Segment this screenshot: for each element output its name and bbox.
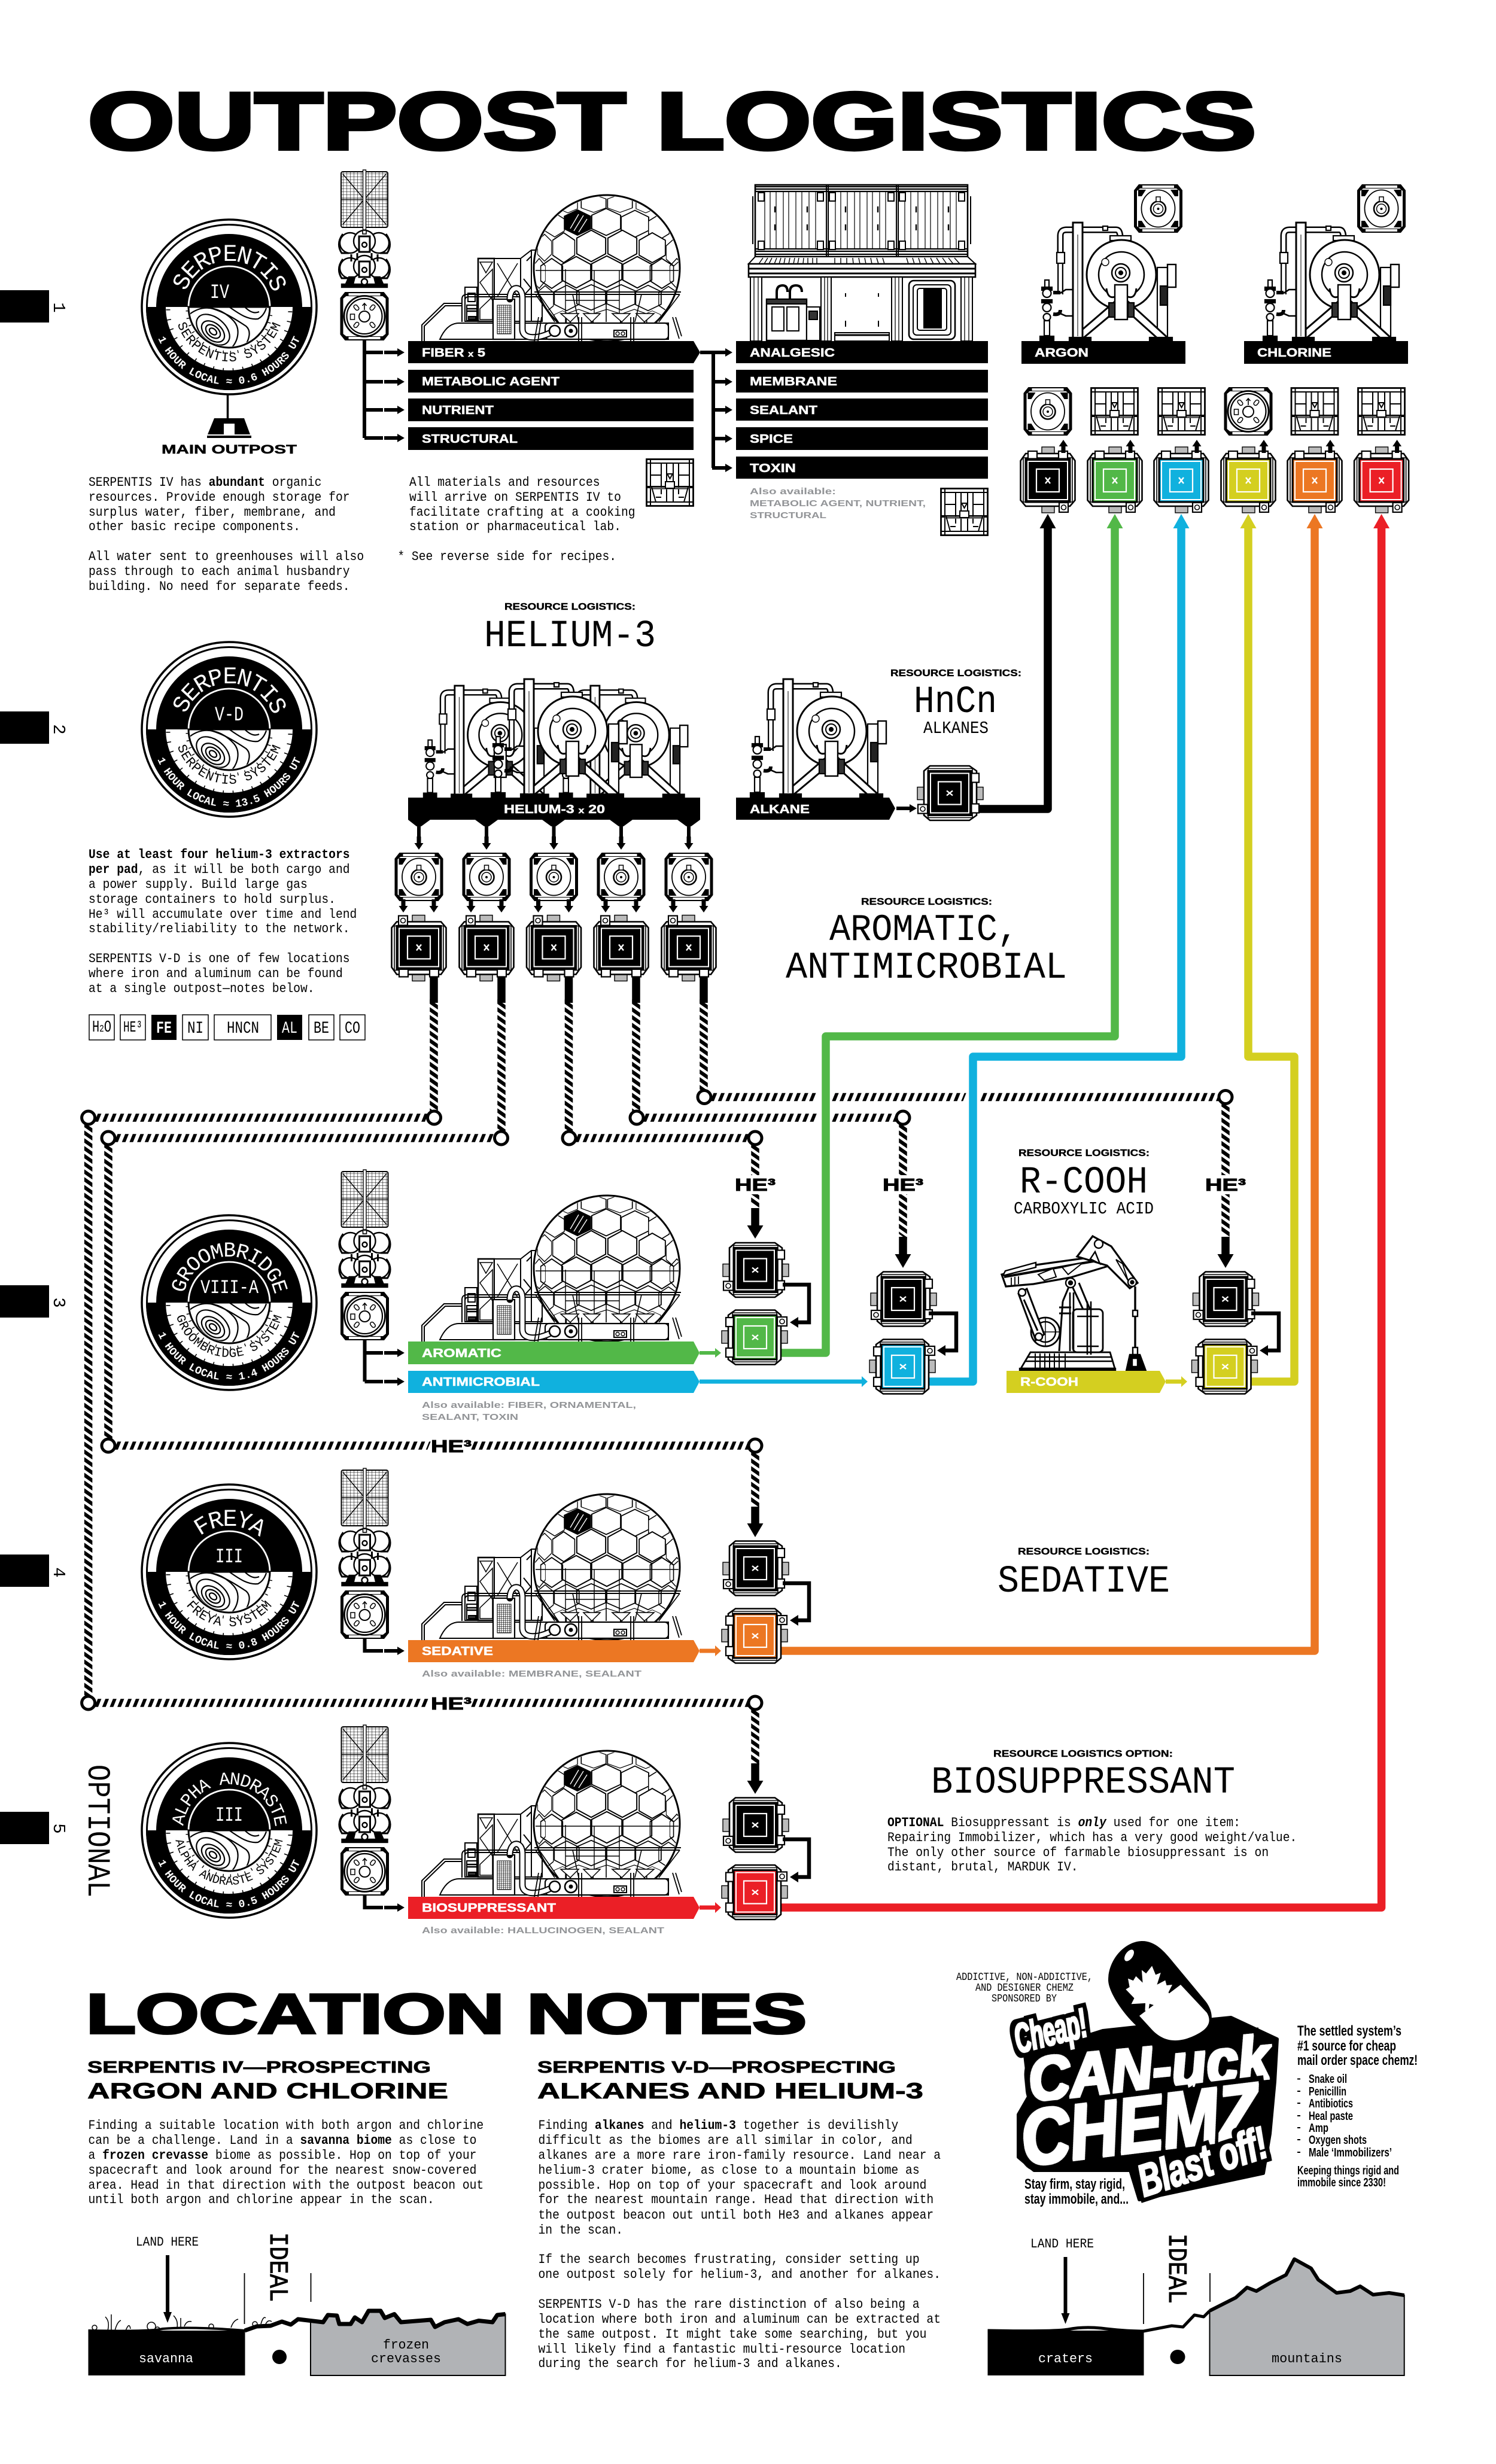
badge: Groombridge VIII-A: GROOMBRIDGE xyxy=(172,1242,288,1294)
resource bars: recipes: ANALGESIC xyxy=(750,346,835,360)
alkane extractor xyxy=(736,679,983,820)
text: Serpentis IV notes: SERPENTIS IV has abundant organic xyxy=(89,476,321,490)
HE3 labels on rails: HE³ xyxy=(883,1176,923,1195)
diagram: craters to mountains: mountains xyxy=(1272,2352,1342,2366)
stack: solar, pods, extractor xyxy=(339,170,390,340)
text: materials note: facilitate crafting at a cooking xyxy=(409,506,636,520)
text: Serpentis IV location note: a frozen crevasse biome as possible. Hop on top of your xyxy=(89,2149,476,2163)
text: Serpentis IV notes: resources. Provide enough storage for xyxy=(89,491,350,505)
chlorine extractor xyxy=(1244,184,1408,364)
heading: sedative: SEDATIVE xyxy=(998,1560,1170,1604)
branch arrow: Alpha Andraste xyxy=(365,1896,405,1912)
ad copy column: immobile since 2330! xyxy=(1297,2176,1386,2189)
subheading: Serpentis V-D prospecting: SERPENTIS V-D—PROSPECTING xyxy=(537,2058,896,2076)
resource bars: Serpentis IV: FIBER x 5 xyxy=(422,346,485,360)
sponsor line xyxy=(956,1972,1093,2005)
colored resource routes xyxy=(781,527,1382,1908)
text: Serpentis V-D notes: storage containers to hold surplus. xyxy=(89,893,336,907)
element boxes: HNCN xyxy=(227,1020,259,1038)
diagram: savanna to frozen crevasses: LAND HERE xyxy=(136,2235,199,2250)
heading: R-COOH: R-COOH xyxy=(1020,1161,1148,1204)
section tab 2: 2 xyxy=(48,724,68,735)
heading: biosuppressant: BIOSUPPRESSANT xyxy=(931,1762,1235,1805)
text: biosuppressant note: OPTIONAL Biosuppressant is only used for one item: xyxy=(887,1816,1240,1830)
main outpost marker: MAIN OUTPOST xyxy=(162,443,297,457)
resource bars: recipes: TOXIN xyxy=(750,462,796,475)
branching arrows to resources xyxy=(364,340,405,442)
badge: Freya III xyxy=(141,1483,318,1660)
route arrowheads xyxy=(1040,514,1389,528)
argon extractor: ARGON xyxy=(1035,346,1088,360)
ad copy column: mail order space chemz! xyxy=(1297,2052,1418,2068)
heading: helium-3: RESOURCE LOGISTICS: xyxy=(504,602,636,612)
bar: R-COOH: R-COOH xyxy=(1020,1376,1078,1389)
also available: Serpentis IV: STRUCTURAL xyxy=(750,510,826,521)
optional vertical label: OPTIONAL xyxy=(78,1765,115,1897)
stack: Groombridge xyxy=(339,1170,390,1340)
element boxes: FE xyxy=(156,1020,172,1038)
text: materials note: All materials and resources xyxy=(409,476,600,490)
resource bars: recipes xyxy=(736,341,988,479)
also available: Groombridge xyxy=(422,1400,636,1422)
diagram: craters to mountains xyxy=(987,2234,1404,2375)
text: Serpentis V-D location note: during the search for helium-3 and alkanes. xyxy=(539,2357,842,2371)
ad copy column: Male ‘Immobilizers’ xyxy=(1309,2146,1392,2159)
text: Serpentis IV location note xyxy=(89,2119,484,2207)
also available: Serpentis IV: Also available: xyxy=(750,486,836,497)
pumpjack xyxy=(1002,1236,1146,1371)
helium-3 striped rail network xyxy=(82,1002,1232,1763)
ad tagline: Stay firm, stay rigid, xyxy=(1024,2176,1125,2192)
text: Serpentis V-D notes: stability/reliability to the network. xyxy=(89,922,350,936)
text: Serpentis V-D location note xyxy=(539,2119,941,2371)
greenhouse xyxy=(422,194,683,341)
ad logo: Can-uck Chemz: CAN-uck xyxy=(1025,2022,1276,2115)
text: Serpentis V-D location note: alkanes are a more rare iron-family resource. Land near a xyxy=(539,2149,941,2163)
heading: R-COOH xyxy=(1014,1148,1154,1219)
heading: biosuppressant: RESOURCE LOGISTICS OPTION: xyxy=(993,1749,1173,1759)
processing pair: blue xyxy=(869,1237,956,1394)
ad copy column xyxy=(1297,2023,1418,2189)
greenhouse: Alpha Andraste xyxy=(422,1750,683,1897)
resource bars: Serpentis IV: METABOLIC AGENT xyxy=(422,375,560,388)
text: Serpentis IV location note: can be a challenge. Land in a savanna biome as close to xyxy=(89,2134,476,2148)
text: Serpentis V-D notes: per pad, as it will be both cargo and xyxy=(89,863,350,877)
text: Serpentis V-D location note: SERPENTIS V-D has the rare distinction of also being a xyxy=(539,2298,920,2312)
ad copy column: Heal paste xyxy=(1309,2110,1353,2123)
resource bars: Serpentis IV: NUTRIENT xyxy=(422,404,494,417)
text: Serpentis V-D location note: for the nearest mountain range. Head that direction with xyxy=(539,2193,934,2207)
badge: Serpentis V-D: 1 HOUR LOCAL ≈ 13.5 HOURS UT xyxy=(158,756,300,807)
badge: Serpentis IV xyxy=(141,218,318,396)
heading: R-COOH: RESOURCE LOGISTICS: xyxy=(1018,1148,1150,1158)
text: Serpentis V-D location note: the same outpost. It might take some searching, but you xyxy=(539,2328,926,2342)
sponsor line: ADDICTIVE, NON-ADDICTIVE, xyxy=(956,1972,1093,1984)
badge: Alpha Andraste III: ALPHA ANDRASTE SYSTEM xyxy=(175,1839,282,1885)
resource bars: Serpentis IV xyxy=(408,341,700,450)
sponsor line: SPONSORED BY xyxy=(992,1993,1057,2005)
badge: Freya III: FREYA SYSTEM xyxy=(187,1600,272,1626)
element boxes xyxy=(89,1015,365,1040)
HE3 labels on rails: HE³ xyxy=(431,1437,472,1456)
heading: aromatic, antimicrobial: AROMATIC, xyxy=(829,909,1018,951)
also available: Alpha Andraste: Also available: HALLUCINOGEN, SEALANT xyxy=(422,1925,664,1936)
badge: Alpha Andraste III xyxy=(141,1742,318,1919)
resource bar: Sedative xyxy=(408,1640,721,1662)
icon: crate left xyxy=(646,460,693,506)
alkane extractor: ALKANE xyxy=(750,803,810,816)
badge: Alpha Andraste III: 1 HOUR LOCAL ≈ 0.5 HOURS UT xyxy=(158,1859,299,1908)
text: Serpentis IV location note: spacecraft and look around for the nearest snow-covered xyxy=(89,2164,476,2178)
text: Serpentis V-D location note: one outpost solely for helium-3, and another for alkanes. xyxy=(539,2268,941,2282)
text: Serpentis IV notes: other basic recipe components. xyxy=(89,520,300,534)
ad copy column: #1 source for cheap xyxy=(1297,2038,1396,2054)
HE3 labels on rails: HE³ xyxy=(735,1176,776,1195)
text: Serpentis IV notes: surplus water, fiber, membrane, and xyxy=(89,506,336,520)
argon extractor xyxy=(1021,184,1185,364)
section tab 1: 1 xyxy=(48,302,68,313)
diagram: savanna to frozen crevasses xyxy=(89,2232,505,2375)
ad logo: Can-uck Chemz xyxy=(1010,1941,1277,2207)
ad copy column: Keeping things rigid and xyxy=(1297,2164,1399,2177)
text: Serpentis V-D location note: location where both iron and aluminum can be extracted at xyxy=(539,2313,941,2327)
branch arrow: Freya xyxy=(365,1639,405,1655)
badge: Serpentis V-D: V-D xyxy=(215,704,244,727)
text: Serpentis V-D location note: will likely find a fantastic multi-resource location xyxy=(539,2343,905,2357)
diagram: savanna to frozen crevasses: crevasses xyxy=(371,2352,441,2366)
text: Serpentis V-D location note: the outpost beacon out until both He3 and alkanes appear xyxy=(539,2209,934,2223)
section tab 3: 3 xyxy=(48,1297,68,1308)
processing pair: yellow xyxy=(1192,1237,1279,1394)
also available: Freya: Also available: MEMBRANE, SEALANT xyxy=(422,1669,641,1679)
stack: Freya xyxy=(339,1468,390,1639)
text: biosuppressant note: The only other source of farmable biosuppressant is on xyxy=(887,1846,1269,1860)
ad copy column: Penicillin xyxy=(1309,2085,1346,2098)
resource bars: recipes: SPICE xyxy=(750,433,793,446)
badge: Serpentis IV: SERPENTIS xyxy=(174,245,286,291)
element boxes: NI xyxy=(187,1020,203,1038)
also available: Serpentis IV xyxy=(750,486,926,521)
ad copy column: Snake oil xyxy=(1309,2073,1347,2086)
badge: Serpentis V-D: SERPENTIS xyxy=(174,668,286,713)
ad copy column: Amp xyxy=(1309,2122,1328,2135)
badge: Groombridge VIII-A: 1 HOUR LOCAL ≈ 1.4 HOURS UT xyxy=(158,1331,299,1380)
ad logo: Can-uck Chemz: Blast off! xyxy=(1132,2118,1273,2207)
subheading: Serpentis IV prospecting: ARGON AND CHLORINE xyxy=(87,2079,448,2103)
heading: sedative: RESOURCE LOGISTICS: xyxy=(1018,1547,1150,1557)
section tab 4: 4 xyxy=(48,1567,68,1578)
section tab 3 xyxy=(0,1285,68,1318)
diagram: savanna to frozen crevasses: savanna xyxy=(139,2352,193,2366)
heading: R-COOH: CARBOXYLIC ACID xyxy=(1014,1199,1154,1219)
resource bars: recipes: MEMBRANE xyxy=(750,375,837,388)
title: OUTPOST LOGISTICS xyxy=(88,76,1256,166)
heading: aromatic, antimicrobial: ANTIMICROBIAL xyxy=(786,947,1067,989)
subheading: Serpentis IV prospecting xyxy=(87,2058,448,2103)
heading: aromatic, antimicrobial xyxy=(786,897,1067,989)
HE3 labels on rails: HE³ xyxy=(1205,1176,1246,1195)
text: Serpentis V-D location note: helium-3 crater biome, as close to a mountain biome as xyxy=(539,2164,920,2178)
text: biosuppressant note xyxy=(887,1816,1297,1875)
subheading: Serpentis V-D prospecting xyxy=(537,2058,923,2103)
badge: Serpentis V-D: SERPENTIS SYSTEM xyxy=(178,744,281,784)
heading: HnCn alkanes xyxy=(890,668,1021,738)
diagram: craters to mountains: craters xyxy=(1038,2352,1093,2366)
text: Serpentis IV notes xyxy=(89,476,364,594)
heading: HnCn alkanes: HnCn xyxy=(914,681,997,724)
text: Serpentis V-D notes xyxy=(89,848,357,996)
badge: Freya III: 1 HOUR LOCAL ≈ 0.8 HOURS UT xyxy=(158,1601,299,1649)
helium-3 bar with five outputs: HELIUM-3 x 20 xyxy=(504,803,605,816)
text: Serpentis IV location note: until both argon and chlorine appear in the scan. xyxy=(89,2193,434,2207)
storehouse building xyxy=(749,185,975,341)
badge: Serpentis IV: IV xyxy=(210,282,229,305)
chlorine extractor: CHLORINE xyxy=(1257,346,1331,360)
also available: Groombridge: Also available: FIBER, ORNAMENTAL, xyxy=(422,1400,636,1410)
badge: Serpentis V-D xyxy=(141,641,318,818)
ad copy column: The settled system’s xyxy=(1297,2023,1401,2039)
main outpost marker xyxy=(162,395,297,457)
section tab 4 xyxy=(0,1555,68,1587)
element boxes: BE xyxy=(314,1020,329,1038)
branching arrows to recipes xyxy=(700,348,732,472)
bar: R-COOH xyxy=(1007,1371,1187,1393)
ad tagline xyxy=(1024,2176,1129,2207)
section tab 1 xyxy=(0,290,68,323)
text: biosuppressant note: Repairing Immobilizer, which has a very good weight/value. xyxy=(887,1831,1297,1845)
text: Serpentis V-D location note: in the scan. xyxy=(539,2223,623,2238)
heading: HnCn alkanes: RESOURCE LOGISTICS: xyxy=(890,668,1021,679)
text: Serpentis V-D notes: where iron and aluminum can be found xyxy=(89,967,343,981)
section tab 5: 5 xyxy=(48,1823,68,1834)
ad logo: Can-uck Chemz: Cheap! xyxy=(1010,1999,1091,2063)
badge: Serpentis IV: SERPENTIS SYSTEM xyxy=(178,322,281,361)
processor row xyxy=(1021,440,1409,513)
resource bars: Groombridge: AROMATIC xyxy=(422,1347,501,1360)
text: Serpentis IV notes: building. No need for separate feeds. xyxy=(89,580,350,594)
icon: crate right xyxy=(941,488,987,535)
text: Serpentis V-D location note: possible. Hop on top of your spacecraft and look around xyxy=(539,2179,926,2193)
helium-3 storage and processors xyxy=(391,853,716,1003)
text: Serpentis V-D location note: If the search becomes frustrating, consider setting up xyxy=(539,2253,920,2267)
badge: Alpha Andraste III: III xyxy=(215,1805,243,1827)
text: Serpentis IV location note: Finding a suitable location with both argon and chlorine xyxy=(89,2119,484,2133)
text: biosuppressant note: distant, brutal, MARDUK IV. xyxy=(887,1860,1078,1875)
processing pair: green xyxy=(722,1208,809,1364)
diagram: craters to mountains: LAND HERE xyxy=(1030,2237,1094,2252)
text: Serpentis V-D notes: Use at least four helium-3 extractors xyxy=(89,848,350,862)
resource bar: Biosuppressant: BIOSUPPRESSANT xyxy=(422,1902,556,1915)
text: Serpentis V-D notes: He³ will accumulate over time and lend xyxy=(89,908,357,922)
HE3 labels on rails xyxy=(431,1175,1248,1714)
greenhouse: Groombridge xyxy=(422,1195,683,1341)
diagram: craters to mountains: IDEAL xyxy=(1161,2234,1191,2304)
text: materials note: will arrive on SERPENTIS IV to xyxy=(409,491,621,505)
processing pair: red xyxy=(722,1763,809,1920)
badge: Serpentis IV: 1 HOUR LOCAL ≈ 0.6 HOURS UT xyxy=(158,336,299,384)
text: Serpentis V-D notes: SERPENTIS V-D is one of few locations xyxy=(89,952,350,966)
also available: Serpentis IV: METABOLIC AGENT, NUTRIENT, xyxy=(750,498,926,509)
resource bars: Groombridge xyxy=(408,1341,868,1393)
ad tagline: stay immobile, and... xyxy=(1024,2191,1129,2207)
ad copy column: Oxygen shots xyxy=(1309,2134,1367,2147)
subheading: Serpentis IV prospecting: SERPENTIS IV—PROSPECTING xyxy=(87,2058,431,2076)
badge: Freya III: FREYA xyxy=(194,1510,263,1537)
heading: HnCn alkanes: ALKANES xyxy=(923,719,989,738)
text: materials note xyxy=(397,476,636,564)
resource bar: Biosuppressant xyxy=(408,1897,721,1919)
text: materials note: * See reverse side for recipes. xyxy=(397,550,616,564)
text: Serpentis V-D location note: difficult as the biomes are all similar in color, and xyxy=(539,2134,913,2148)
section tab 5 xyxy=(0,1812,68,1844)
element boxes: CO xyxy=(345,1020,360,1038)
subheading: Serpentis V-D prospecting: ALKANES AND HELIUM-3 xyxy=(537,2079,923,2103)
heading: aromatic, antimicrobial: RESOURCE LOGISTICS: xyxy=(861,897,992,907)
HE3 labels on rails: HE³ xyxy=(431,1695,472,1714)
resource bars: Serpentis IV: STRUCTURAL xyxy=(422,433,518,446)
text: Serpentis IV notes: All water sent to greenhouses will also xyxy=(89,550,364,564)
resource bars: recipes: SEALANT xyxy=(750,404,817,417)
ad logo: Can-uck Chemz: CHEMZ xyxy=(1015,2066,1266,2183)
text: Serpentis V-D location note: Finding alkanes and helium-3 together is devilishly xyxy=(539,2119,898,2133)
diagram: savanna to frozen crevasses: frozen xyxy=(383,2338,429,2353)
greenhouse: Freya xyxy=(422,1493,683,1640)
heading: location notes: LOCATION NOTES xyxy=(86,1982,807,2045)
processing pair: orange xyxy=(722,1507,809,1663)
text: Serpentis V-D notes: a power supply. Build large gas xyxy=(89,878,308,892)
badge: Groombridge VIII-A: GROOMBRIDGE SYSTEM xyxy=(177,1315,282,1357)
diagram: savanna to frozen crevasses: IDEAL xyxy=(262,2232,292,2302)
text: Serpentis IV location note: area. Head in that direction with the outpost beacon out xyxy=(89,2179,484,2193)
text: Serpentis IV notes: pass through to each animal husbandry xyxy=(89,565,350,579)
storage icon row xyxy=(1023,387,1405,436)
heading: helium-3: HELIUM-3 xyxy=(484,615,656,658)
text: Serpentis V-D notes: at a single outpost—notes below. xyxy=(89,982,315,996)
section tab 2 xyxy=(0,711,68,744)
sponsor line: AND DESIGNER CHEMZ xyxy=(975,1982,1074,1994)
text: materials note: station or pharmaceutical lab. xyxy=(409,520,621,534)
stack: Alpha Andraste xyxy=(339,1725,390,1896)
element boxes: HE³ xyxy=(123,1018,142,1036)
also available: Groombridge: SEALANT, TOXIN xyxy=(422,1412,518,1422)
ad copy column: Antibiotics xyxy=(1309,2097,1353,2110)
branch arrows: Groombridge xyxy=(365,1340,405,1386)
element boxes: H2O xyxy=(92,1019,111,1037)
badge: Freya III: III xyxy=(215,1546,243,1569)
helium-3 extractor machines xyxy=(424,679,688,798)
resource bar: Sedative: SEDATIVE xyxy=(422,1645,493,1658)
resource bars: Groombridge: ANTIMICROBIAL xyxy=(422,1376,540,1389)
badge: Groombridge VIII-A: VIII-A xyxy=(200,1277,259,1299)
helium-3 bar with five outputs xyxy=(408,798,700,850)
element boxes: AL xyxy=(282,1020,297,1038)
badge: Groombridge VIII-A xyxy=(141,1214,318,1391)
badge: Alpha Andraste III: ALPHA ANDRASTE xyxy=(172,1772,287,1826)
